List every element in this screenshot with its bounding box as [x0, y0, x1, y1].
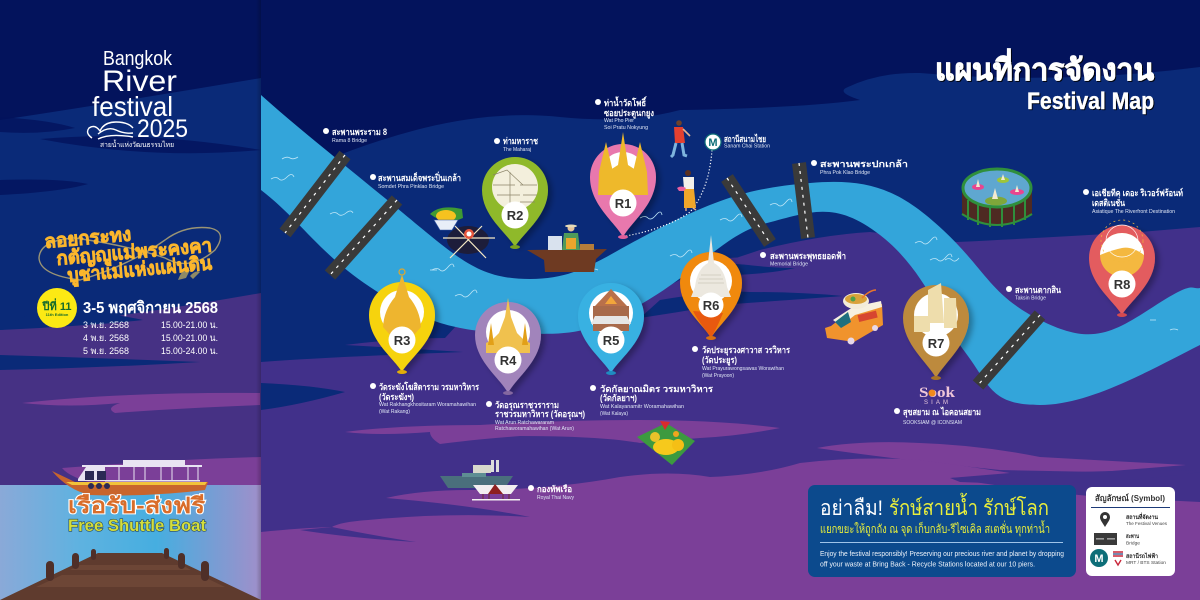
label: Rama 8 Bridge: สะพานพระราม 8	[332, 127, 387, 137]
pin R6	[680, 235, 742, 340]
icon: Sook Siam logo: SIAM	[924, 400, 950, 406]
label: The Maharaj: ท่ามหาราช	[503, 136, 538, 146]
label: Somdet Phra Pinklao Bridge	[370, 171, 461, 190]
icon: vendor boat	[527, 224, 607, 272]
heading: Loy Krathong: กตัญญูแม่พระคงคา	[56, 235, 213, 271]
label: Sanam Chai Station: M	[708, 137, 718, 149]
icon: walking woman	[677, 170, 696, 211]
label: Royal Thai Navy: Royal Thai Navy	[537, 495, 574, 501]
label: Wat Arun: Wat Arun Ratchawararam	[495, 420, 554, 426]
logo: Bangkok River Festival 2025	[88, 48, 188, 149]
label: Wat Pho Pier: ซอยประตูนกยูง	[604, 108, 654, 119]
festival dates: 15.00-21.00 น.	[161, 320, 218, 331]
badge: 11th edition: 11th Edition	[46, 312, 69, 317]
river wave marks	[271, 157, 1178, 330]
label: Sanam Chai Station: สถานีสนามไชย	[724, 133, 766, 144]
legend: symbols: สถานีรถไฟฟ้า	[1126, 552, 1158, 560]
label: Wat Rakang: วัดระฆังโฆสิตาราม วรมหาวิหาร	[379, 381, 479, 392]
logo: Bangkok River Festival 2025: สายน้ำแห่งวัฒนธรรมไทย	[100, 138, 174, 149]
label: Somdet Phra Pinklao Bridge: สะพานสมเด็จพระปิ่นเกล้า	[378, 171, 461, 183]
label: Wat Rakang: Wat Rakhangkhositaram Woramahawihan	[379, 402, 476, 408]
pin R3: R3	[394, 333, 410, 348]
label: Wat Arun	[486, 400, 585, 432]
callout: recycling	[808, 485, 1076, 577]
festival dates: 5 พ.ย. 2568	[83, 346, 129, 357]
heading: free shuttle boat	[68, 493, 206, 535]
festival dates: 15.00-21.00 น.	[161, 333, 218, 344]
label: Wat Kalaya: (วัดกัลยาฯ)	[600, 393, 637, 403]
icon: navy ship and pavilion	[440, 460, 520, 500]
legend: symbols: สะพาน	[1126, 533, 1140, 540]
label: Asiatique: เอเชียทีค เดอะ ริเวอร์ฟร้อนท์	[1092, 187, 1183, 198]
festival dates: 3-5 พฤศจิกายน 2568	[83, 299, 218, 317]
label: Rama 8 Bridge	[323, 127, 387, 144]
festival dates: 4 พ.ย. 2568	[83, 333, 129, 344]
callout: recycling: off your waste at Bring Back - Recycle Stations located at our 10 piers.	[820, 562, 1035, 568]
label: Wat Kalaya	[590, 384, 713, 417]
label: Wat Rakang: (Wat Rakang)	[379, 409, 410, 415]
pin R7	[903, 283, 969, 380]
label: Taksin Bridge	[1006, 285, 1062, 302]
icon: food truck	[825, 290, 883, 344]
label: Asiatique	[1083, 187, 1183, 215]
label: Royal Thai Navy	[528, 483, 574, 501]
label: Wat Pho Pier: ท่าน้ำวัดโพธิ์	[604, 96, 647, 108]
dotted route from R1 to Sanam Chai	[626, 150, 712, 236]
label: Phra Pok Klao Bridge	[811, 159, 908, 176]
logo: Bangkok River Festival 2025: 2025	[137, 115, 188, 143]
title	[935, 48, 1154, 115]
logo: Bangkok River Festival 2025: Bangkok	[103, 48, 173, 70]
label: Wat Rakang: (วัดระฆังฯ)	[379, 392, 414, 402]
label: The Maharaj	[494, 136, 538, 153]
legend: symbols: Bridge	[1126, 540, 1141, 546]
label: Wat Rakang	[370, 381, 479, 415]
icon: Sook Siam logo: Sook	[919, 385, 956, 401]
pin R2: R2	[507, 208, 523, 223]
pin R7: R7	[928, 336, 944, 351]
heading: Loy Krathong	[39, 224, 220, 288]
label: Wat Arun: ราชวรมหาวิหาร (วัดอรุณฯ)	[495, 409, 585, 420]
label: Memorial Bridge: สะพานพระพุทธยอดฟ้า	[770, 251, 846, 262]
icon: food dishes	[430, 207, 495, 258]
logo: Bangkok River Festival 2025: festival	[92, 91, 173, 122]
left panel	[0, 0, 261, 600]
label: Sanam Chai Station	[705, 133, 770, 150]
callout: recycling: แยกขยะให้ถูกถัง ณ จุด เก็บกลับ-รีไซเคิล สเตชั่น ทุกท่าน้ำ	[820, 520, 1050, 537]
pin R1	[590, 132, 656, 239]
pin R4: R4	[500, 353, 517, 368]
label: Wat Prayoon: Wat Prayurawongsawas Worawihan	[702, 366, 784, 372]
label: Wat Kalaya: (Wat Kalaya)	[600, 411, 628, 417]
pin R6: R6	[703, 298, 719, 313]
title: แผนที่การจัดงาน	[935, 48, 1154, 87]
label: Wat Prayoon: วัดประยุรวงศาวาส วรวิหาร	[702, 345, 790, 356]
legend: symbols: M	[1094, 553, 1104, 565]
label: Taksin Bridge: สะพานตากสิน	[1015, 285, 1062, 295]
legend: symbols	[1086, 487, 1175, 576]
bridge: Somdet Phra Pinklao	[330, 200, 397, 275]
title: Festival Map	[1027, 88, 1154, 115]
label: Wat Kalaya: วัดกัลยาณมิตร วรมหาวิหาร	[600, 384, 713, 394]
badge: 11th edition	[37, 288, 77, 328]
label: Memorial Bridge: Memorial Bridge	[770, 262, 808, 268]
legend: symbols: The Festival Venues	[1126, 521, 1168, 526]
label: Wat Prayoon: (วัดประยูร)	[702, 355, 737, 366]
label: Wat Arun: Ratchaworamahawihan (Wat Arun)	[495, 426, 574, 432]
label: Somdet Phra Pinklao Bridge: Somdet Phra Pinklao Bridge	[378, 184, 444, 190]
icon: pier	[0, 548, 261, 600]
icon: Sook Siam logo	[919, 385, 956, 406]
icon: fruit offering	[637, 421, 695, 465]
bridge: Taksin	[978, 315, 1040, 385]
label: Wat Pho Pier: Wat Pho Pier	[604, 118, 634, 124]
pin R8: R8	[1114, 277, 1130, 292]
festival dates	[83, 299, 218, 357]
heading: Loy Krathong: ลอยกระทง	[44, 224, 132, 253]
bridge: Memorial	[727, 178, 770, 243]
legend: symbols: MRT / BTS Station	[1126, 560, 1167, 565]
label: Wat Pho Pier	[595, 96, 654, 131]
heading: free shuttle boat: Free Shuttle Boat	[68, 516, 206, 535]
festival dates: 15.00-24.00 น.	[161, 346, 218, 357]
label: Phra Pok Klao Bridge: Phra Pok Klao Bridge	[820, 170, 870, 176]
label: Wat Prayoon	[692, 345, 790, 379]
label: Taksin Bridge: Taksin Bridge	[1015, 296, 1046, 302]
label: Wat Pho Pier: Soi Pratu Nokyung	[604, 125, 648, 131]
label: Sanam Chai Station: Sanam Chai Station	[724, 144, 770, 150]
label: Wat Kalaya: Wat Kalayanamitr Woramahawihan	[600, 404, 684, 410]
festival dates: 3 พ.ย. 2568	[83, 320, 129, 331]
legend: symbols: สถานที่จัดงาน	[1126, 512, 1159, 521]
pin R5: R5	[603, 333, 619, 348]
label: Wat Arun: วัดอรุณราชวราราม	[495, 400, 559, 411]
icon: shuttle boat	[52, 460, 208, 495]
label: Sook Siam	[894, 406, 981, 426]
heading: free shuttle boat: เรือรับ-ส่งฟรี	[68, 493, 205, 518]
bridge: Rama 8	[285, 155, 345, 233]
logo: Bangkok River Festival 2025: River	[102, 65, 177, 98]
label: Royal Thai Navy: กองทัพเรือ	[537, 483, 572, 494]
label: Memorial Bridge	[760, 251, 846, 268]
legend: symbols: สัญลักษณ์ (Symbol)	[1095, 493, 1165, 504]
pin R5	[578, 283, 644, 375]
pin R1: R1	[615, 196, 631, 211]
label: The Maharaj: The Maharaj	[503, 147, 531, 153]
pin R3	[369, 269, 435, 374]
icon: krathong pool	[962, 169, 1032, 227]
label: Asiatique: เดสติเนชั่น	[1092, 196, 1126, 208]
badge: 11th edition: ปีที่ 11	[41, 298, 72, 313]
label: Wat Prayoon: (Wat Prayoon)	[702, 373, 734, 379]
label: Rama 8 Bridge: Rama 8 Bridge	[332, 138, 367, 144]
pin R2	[482, 157, 548, 249]
callout: recycling: อย่าลืม!	[820, 497, 883, 520]
label: Sook Siam: SOOKSIAM @ ICONSIAM	[903, 420, 962, 426]
icon: walking man	[671, 120, 690, 157]
map background	[261, 0, 1200, 600]
river	[261, 95, 1200, 405]
heading: Loy Krathong: บูชาแม่แห่งแผ่นดิน	[67, 253, 213, 288]
bridge: Phra Pok Klao	[799, 163, 808, 238]
label: Phra Pok Klao Bridge: สะพานพระปกเกล้า	[820, 159, 908, 169]
callout: recycling: รักษ์สายน้ำ รักษ์โลก	[889, 493, 1049, 520]
pin R4	[475, 298, 541, 395]
label: Asiatique: Asiatique The Riverfront Destination	[1092, 209, 1175, 215]
callout: recycling: Enjoy the festival responsibly! Preserving our precious river and planet by dropping	[820, 551, 1064, 558]
pin R8	[1089, 220, 1155, 317]
label: Sook Siam: สุขสยาม ณ ไอคอนสยาม	[903, 406, 981, 418]
